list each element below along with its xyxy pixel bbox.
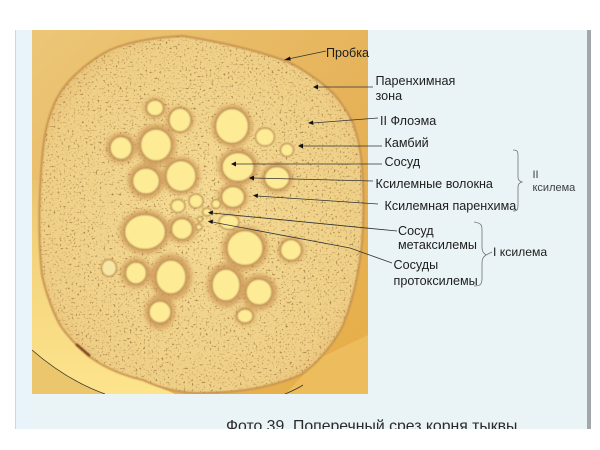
label: protoxylem vessels: протоксилемы	[394, 274, 478, 288]
label: cork	[284, 46, 369, 60]
label: protoxylem vessels	[208, 220, 478, 288]
label: vessel	[231, 155, 421, 169]
vessels	[102, 100, 302, 323]
label: parenchyma zone: Паренхимная	[376, 74, 455, 88]
label: parenchyma zone	[313, 74, 455, 103]
label: metaxylem vessel: метаксилемы	[398, 238, 477, 252]
photo: root cross-section micrograph	[32, 30, 368, 394]
label: xylem fibres	[249, 176, 493, 191]
tissue disc	[32, 30, 368, 394]
label: metaxylem vessel	[208, 210, 477, 252]
bracket: secondary xylem: II	[532, 169, 539, 181]
label: secondary phloem: II Флоэма	[380, 114, 436, 128]
label: metaxylem vessel: Сосуд	[398, 224, 434, 238]
dark edge mark	[76, 344, 90, 356]
label: parenchyma zone: зона	[376, 89, 402, 103]
label: xylem fibres: Ксилемные волокна	[376, 177, 493, 191]
lens arc	[32, 350, 303, 394]
label: vessel: Сосуд	[384, 155, 421, 169]
bracket: primary xylem: I ксилема	[493, 245, 547, 259]
label: secondary phloem	[308, 114, 436, 128]
label: cambium	[298, 136, 429, 150]
label: cambium: Камбий	[384, 136, 429, 150]
label: protoxylem vessels: Сосуды	[394, 258, 438, 272]
vessel halos	[106, 98, 304, 329]
label: cork: Пробка	[326, 46, 369, 60]
label: xylem parenchyma	[253, 194, 516, 213]
bracket: primary xylem	[474, 222, 547, 286]
bracket: secondary xylem	[513, 150, 576, 211]
bracket: secondary xylem: ксилема	[532, 182, 576, 194]
label: xylem parenchyma: Ксилемная паренхима	[384, 199, 516, 213]
caption: Фото 39. Поперечный срез корня тыквы	[226, 418, 517, 435]
